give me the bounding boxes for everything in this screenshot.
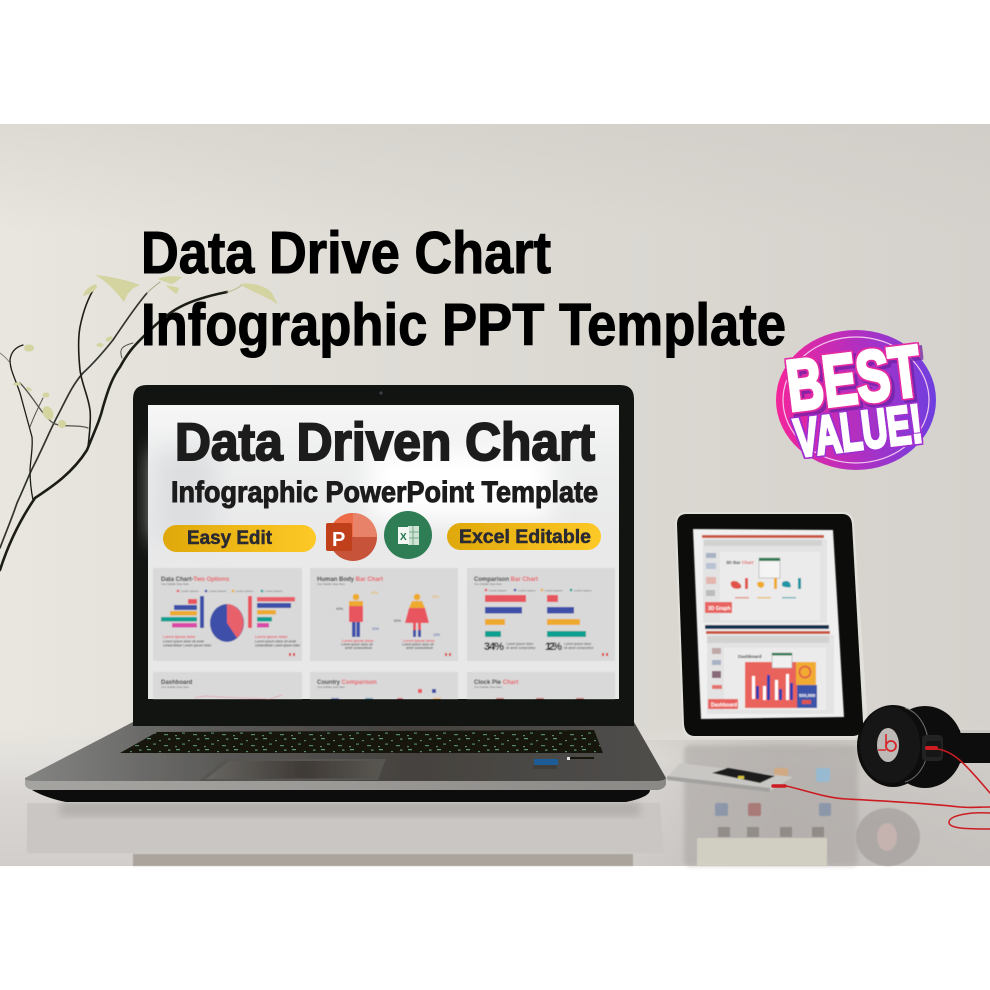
laptop lid xyxy=(133,385,634,726)
panel: data chart two options: Lorem ipsum xyxy=(181,589,199,593)
panel: country comparison xyxy=(310,672,458,699)
decorative plant branch xyxy=(0,282,242,570)
panel: data chart two options: Lorem ipsum dolor sit amet xyxy=(255,640,296,644)
panel: human body bar chart: amet consectetuer xyxy=(345,646,373,650)
panel: comparison bar chart: Lorem ipsum dolor xyxy=(564,642,592,646)
panel: data chart two options: Lorem ipsum xyxy=(236,589,254,593)
panel: dashboard xyxy=(153,672,302,699)
tablet xyxy=(675,512,868,738)
panel: human body bar chart: Lorem Ipsum dolor xyxy=(403,639,435,643)
panel: human body bar chart: Human Body Bar Chart xyxy=(317,577,383,583)
panel: comparison bar chart: 12% xyxy=(545,641,562,653)
panel: clock pie chart xyxy=(467,672,615,699)
panel: human body bar chart: Lorem Ipsum dolor xyxy=(342,639,374,643)
panel: human body bar chart: Your Subtitle Goes Here xyxy=(317,582,345,586)
icon: excel: X xyxy=(400,532,407,543)
panel: clock pie chart: Clock Pie Chart xyxy=(474,680,518,686)
panel: comparison bar chart: sit amet consectetur xyxy=(506,646,536,650)
pill: excel editable: Excel Editable xyxy=(459,527,591,548)
panel: dashboard: Dashboard xyxy=(161,680,193,686)
screen heading: Data Driven Chart xyxy=(175,413,595,472)
label: dashboard: Dashboard xyxy=(711,702,737,708)
panel: data chart two options: consectetuer Lorem ipsum dolor xyxy=(255,644,301,648)
panel: data chart two options: Data Chart-Two Options xyxy=(161,577,230,583)
panel: country comparison: Country Comparison xyxy=(317,680,377,686)
screen heading xyxy=(171,413,598,509)
panel: human body bar chart: Lorem ipsum dolor sit xyxy=(341,642,373,646)
panel: human body bar chart: amet consectetuer xyxy=(406,646,434,650)
panel: comparison bar chart: sit amet consectetur xyxy=(564,646,594,650)
panel: human body bar chart: 30% xyxy=(432,595,439,599)
label: 3D graph xyxy=(705,602,732,613)
icon: powerpoint xyxy=(326,513,377,561)
panel: human body bar chart: 40% xyxy=(371,591,378,595)
pill: excel editable xyxy=(447,523,601,550)
title xyxy=(141,220,786,358)
panel: data chart two options: Lorem Ipsum dolor xyxy=(255,635,288,639)
panel: country comparison: Your Subtitle Goes Here xyxy=(317,685,345,689)
screen heading: Infographic PowerPoint Template xyxy=(171,476,598,509)
title: Infographic PPT Template xyxy=(141,292,786,358)
panel: comparison bar chart: Your Subtitle Goes Here xyxy=(474,582,502,586)
title: Data Drive Chart xyxy=(141,220,551,286)
pill: easy edit xyxy=(163,525,316,552)
panel: comparison bar chart: Lorem ipsum xyxy=(518,588,536,592)
badge: best value: VALUE! xyxy=(791,394,926,469)
panel: comparison bar chart: Lorem ipsum xyxy=(545,588,563,592)
panel: comparison bar chart: Lorem ipsum xyxy=(489,588,507,592)
icon: excel xyxy=(384,511,432,559)
photo background: wall and table xyxy=(0,124,990,866)
tablet screen: 500,000 xyxy=(799,693,816,698)
panel: data chart two options: Lorem ipsum xyxy=(209,589,227,593)
panel: data chart two options: Lorem Ipsum dolor xyxy=(163,635,196,639)
headphones xyxy=(857,705,990,788)
laptop base xyxy=(25,722,666,802)
panel: data chart two options: consectetuer Lorem ipsum dolor xyxy=(163,644,212,648)
label: 3D graph: 3D Graph xyxy=(708,606,731,612)
pill: easy edit: Easy Edit xyxy=(187,528,273,549)
icon: powerpoint: P xyxy=(332,529,345,551)
badge: best value: BEST xyxy=(782,331,925,427)
badge: best value xyxy=(776,330,936,470)
panel: data chart two options xyxy=(153,568,302,661)
laptop xyxy=(25,385,666,802)
panel: comparison bar chart: Lorem ipsum dolor xyxy=(506,642,534,646)
panel: human body bar chart: 20% xyxy=(372,627,379,631)
panel: data chart two options: Your Subtitle Goes Here xyxy=(161,582,189,586)
panel: clock pie chart: Your Subtitle Goes Here xyxy=(474,685,502,689)
panel: comparison bar chart: Lorem ipsum xyxy=(574,588,592,592)
tablet screen xyxy=(693,529,844,719)
panel: human body bar chart: 15% xyxy=(433,633,440,637)
panel: human body bar chart: Lorem ipsum dolor sit xyxy=(402,642,434,646)
tablet screen: 3D Bar Chart xyxy=(726,560,754,565)
panel: dashboard: Your Subtitle Goes Here xyxy=(161,685,189,689)
panel: comparison bar chart xyxy=(467,568,615,661)
laptop screen xyxy=(148,405,619,699)
panel: data chart two options: Lorem ipsum dolor sit amet xyxy=(163,640,204,644)
red audio cable xyxy=(773,748,990,829)
phone on table xyxy=(667,763,793,792)
panel: comparison bar chart: Comparison Bar Chart xyxy=(474,577,538,583)
tablet screen: Dashboard xyxy=(738,654,762,659)
label: dashboard xyxy=(708,699,738,709)
panel: comparison bar chart: 34% xyxy=(484,641,504,653)
panel: human body bar chart xyxy=(310,568,458,661)
table reflections xyxy=(27,745,920,866)
panel: human body bar chart: 50% xyxy=(394,619,401,623)
panel: human body bar chart: 40% xyxy=(336,607,343,611)
plant leaves xyxy=(13,275,278,428)
panel: data chart two options: Lorem ipsum xyxy=(265,589,283,593)
